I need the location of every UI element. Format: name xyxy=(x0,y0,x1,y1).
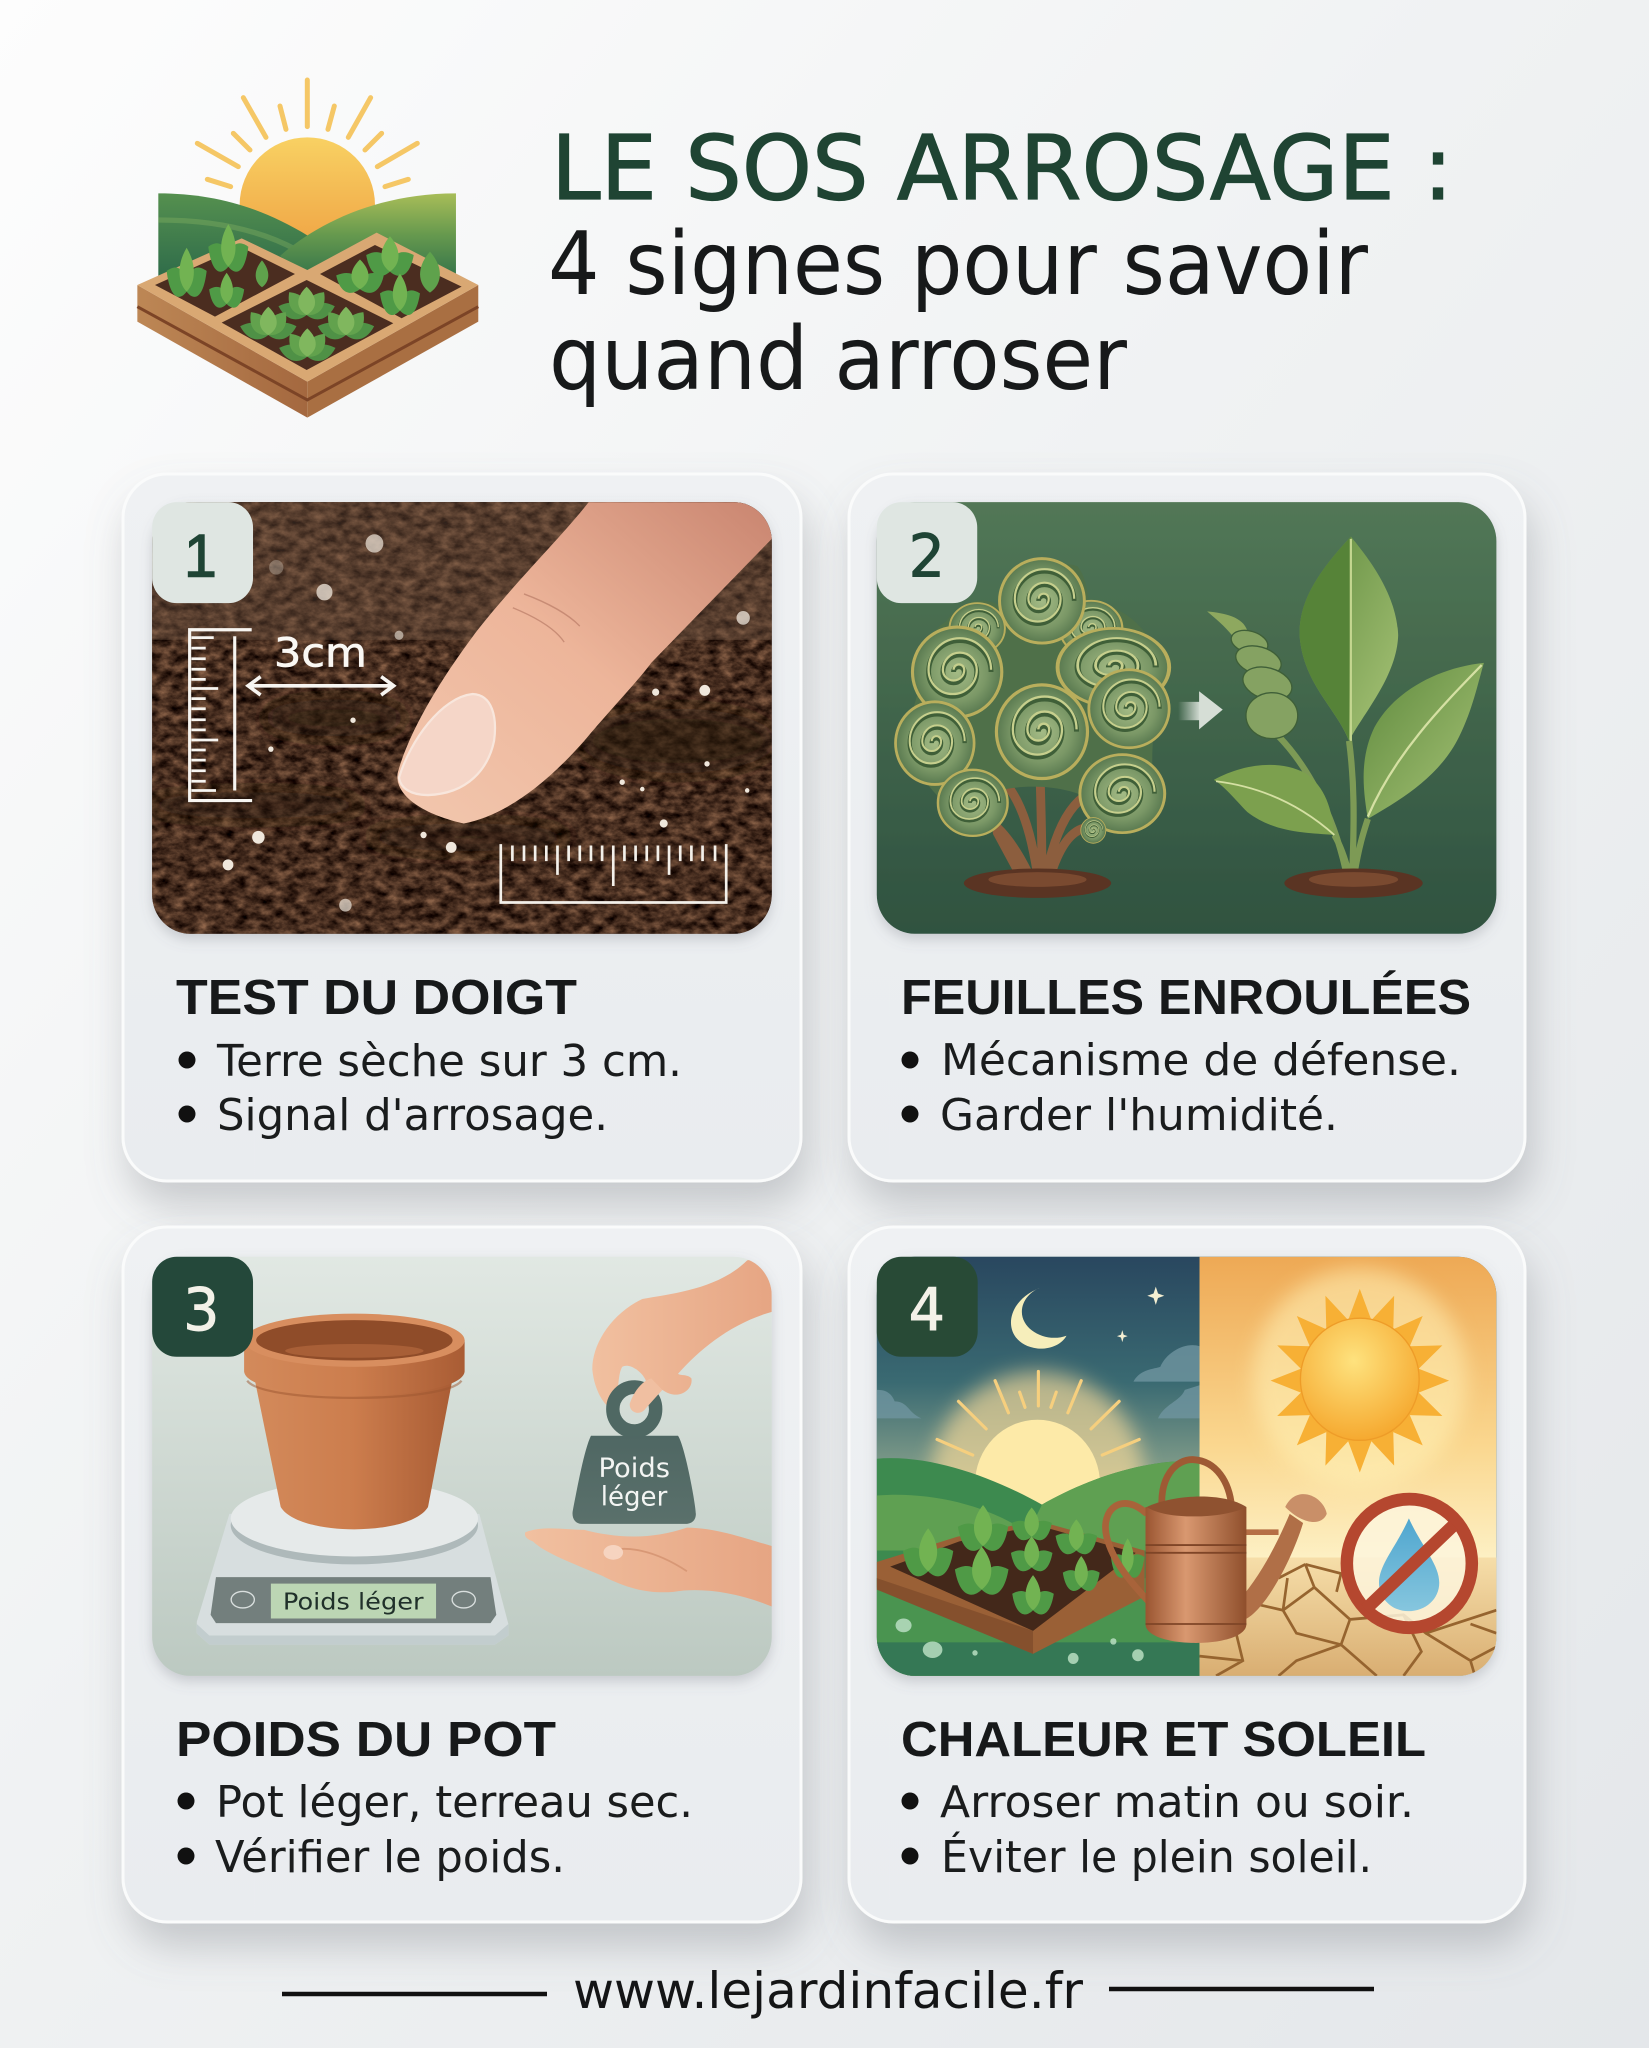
illustration: pot on scale and hands xyxy=(152,1257,772,1676)
panel: chaleur et soleil xyxy=(849,1227,1525,1922)
heading: test du doigt: TEST DU DOIGT xyxy=(176,971,577,1025)
card 1 background xyxy=(123,474,801,1181)
bullet list: Mécanisme de défense. xyxy=(941,1035,1461,1086)
title xyxy=(548,116,1453,410)
card 2 background xyxy=(849,474,1525,1181)
raised bed xyxy=(877,1521,1145,1654)
hot sun side xyxy=(1200,1257,1496,1676)
bullet list: Garder l'humidité. xyxy=(940,1090,1338,1141)
heading line 1: LE SOS ARROSAGE : xyxy=(551,116,1453,220)
logo: sun and raised bed xyxy=(137,80,478,418)
upper hand xyxy=(592,1260,772,1408)
bullet list: Terre sèche sur 3 cm. xyxy=(216,1036,682,1087)
icon: seedlings xyxy=(163,224,440,364)
heading: chaleur et soleil: CHALEUR ET SOLEIL xyxy=(901,1713,1426,1767)
badge 1: 1 xyxy=(184,522,217,590)
watering can xyxy=(1105,1460,1327,1643)
badge 3 xyxy=(152,1257,253,1357)
badge 1 xyxy=(152,502,253,603)
icon: depth ruler xyxy=(190,630,252,801)
bullet list: Vérifier le poids. xyxy=(215,1832,565,1883)
heading line 3: quand arroser xyxy=(549,308,1127,410)
bullet list xyxy=(178,1777,693,1883)
weight: léger xyxy=(601,1482,667,1513)
terracotta pot xyxy=(244,1314,465,1529)
illustration: finger in soil xyxy=(142,502,776,934)
bullet list xyxy=(902,1035,1461,1141)
badge 4: 4 xyxy=(909,1275,945,1344)
weight xyxy=(573,1387,696,1524)
footer website: www.lejardinfacile.fr xyxy=(573,1962,1083,2020)
night and morning side xyxy=(877,1257,1200,1676)
card 4 background xyxy=(849,1227,1525,1922)
fingernail xyxy=(399,694,495,795)
badge 3: 3 xyxy=(183,1275,219,1344)
bullet list xyxy=(178,1036,682,1141)
badge 4 xyxy=(877,1257,978,1357)
arrow: depth xyxy=(248,677,394,695)
illustration: morning versus noon watering xyxy=(877,1257,1496,1676)
kitchen scale xyxy=(197,1480,508,1645)
kitchen scale: Poids léger xyxy=(283,1589,424,1615)
thumb xyxy=(630,1378,662,1413)
panel: test du doigt xyxy=(123,474,801,1181)
label: 3cm: 3cm xyxy=(274,630,367,677)
icon: wooden planter xyxy=(137,233,478,418)
curled plant xyxy=(896,559,1169,898)
heading: feuilles enroulées: FEUILLES ENROULÉES xyxy=(901,971,1471,1025)
heading line 2: 4 signes pour savoir xyxy=(548,213,1368,315)
icon: horizontal ruler xyxy=(501,844,726,902)
panel: feuilles enroulées xyxy=(849,474,1525,1181)
healthy plant xyxy=(1207,537,1484,898)
card 3 background xyxy=(123,1227,801,1922)
heading: poids du pot: POIDS DU POT xyxy=(176,1713,556,1767)
bullet list xyxy=(902,1777,1414,1883)
lower hand xyxy=(525,1528,772,1607)
no-water sign xyxy=(1347,1499,1472,1628)
bullet list: Éviter le plein soleil. xyxy=(941,1830,1372,1883)
icon: sun xyxy=(240,137,375,273)
arrow: before to after xyxy=(1178,691,1223,729)
bullet list: Signal d'arrosage. xyxy=(217,1090,608,1141)
weight: Poids xyxy=(599,1454,670,1484)
illustration: curled and healthy plant xyxy=(877,502,1496,934)
icon: sun rays xyxy=(197,80,417,187)
badge 2 xyxy=(877,502,977,603)
finger xyxy=(397,502,772,824)
panel: poids du pot xyxy=(123,1227,801,1922)
badge 2: 2 xyxy=(909,522,945,591)
bullet list: Pot léger, terreau sec. xyxy=(216,1777,693,1828)
bullet list: Arroser matin ou soir. xyxy=(940,1777,1414,1828)
icon: hills xyxy=(158,193,456,277)
